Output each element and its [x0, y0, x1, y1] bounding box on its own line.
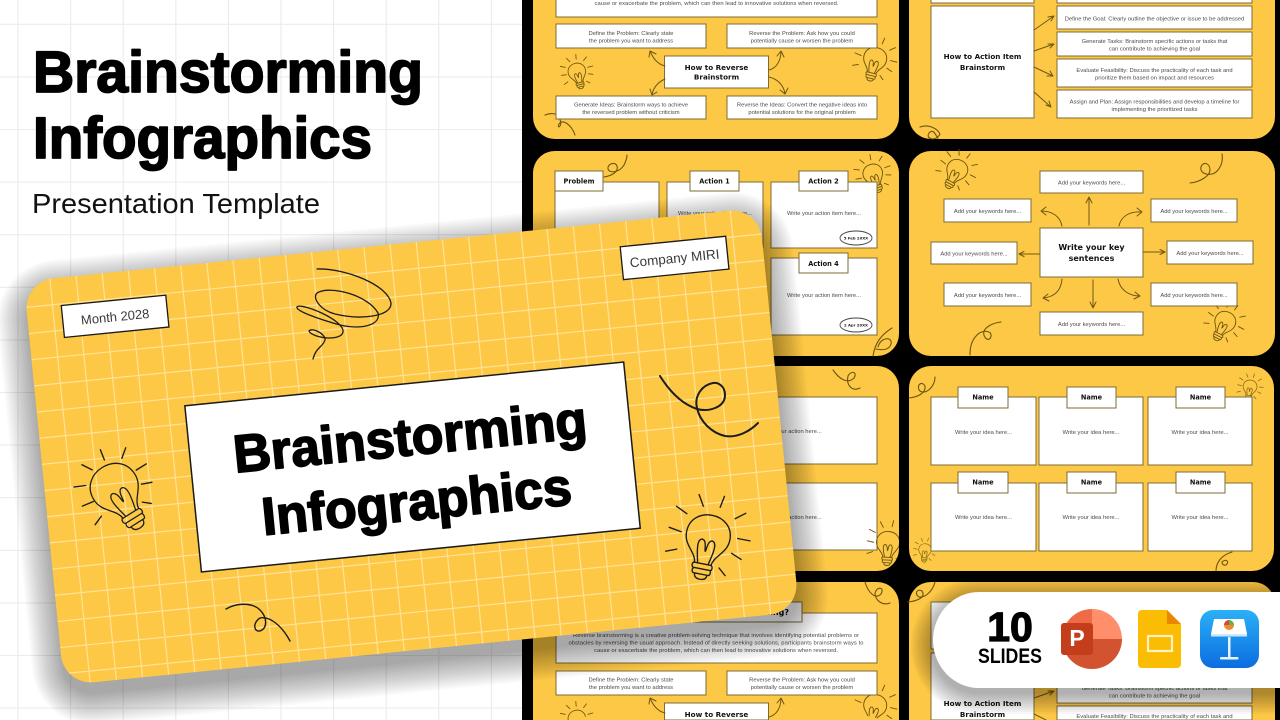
slide thumbnail: what is reverse brainstorming (bottom): obstacles by reversing the usual approach. Instead of directly seeking solutions, participants brainstorm ways to: [568, 640, 864, 646]
slide thumbnail: how to action item brainstorm (bottom): Evaluate Feasibility: Discuss the practicality of each task and: [1076, 714, 1233, 720]
title: Brainstorming Infographics: Infographics: [33, 106, 372, 171]
slide thumbnail: how to reverse brainstorm (top): potentially cause or worsen the problem: [751, 38, 853, 44]
slide thumbnail: what is reverse brainstorming (bottom): Reverse brainstorming is a creative problem-solving technique that involves identifying potential problems or: [573, 633, 859, 639]
slide thumbnail: how to action item brainstorm (top): Brainstorm: [960, 63, 1005, 72]
slide thumbnail: how to reverse brainstorm (top): Define the Problem: Clearly state: [588, 31, 674, 37]
slide thumbnail: key sentence mind map: Write your key: [1058, 243, 1125, 252]
slide thumbnail: key sentence mind map: Add your keywords here...: [954, 209, 1022, 215]
slide thumbnail: key sentence mind map: Add your keywords here...: [1058, 322, 1126, 328]
slide thumbnail: six name cards: Name: [1081, 478, 1103, 486]
black backdrop for slide thumbnails: [522, 0, 1280, 720]
slide thumbnail: six name cards: Name: [1190, 478, 1212, 486]
slide thumbnail: problem and action items: [533, 149, 899, 356]
slide thumbnail: problem and action items: Action 2: [808, 178, 839, 186]
slide thumbnail: six name cards: Write your idea here...: [955, 515, 1012, 521]
slide thumbnail: six name cards: [909, 366, 1274, 571]
slide thumbnail: six name cards: Name: [972, 478, 994, 486]
slide thumbnail: six name cards: Name: [972, 394, 994, 402]
slide thumbnail: how to action item brainstorm (top): Evaluate Feasibility: Discuss the practicality of each task and: [1076, 68, 1233, 74]
slide thumbnail: what is reverse brainstorming (bottom): cause or exacerbate the problem, which can then lead to innovative solutions when reversed.: [594, 648, 838, 654]
icon: light bulb left: [62, 433, 165, 541]
slide thumbnail: six name cards: Write your idea here...: [1172, 515, 1229, 521]
icon: Google Slides: [1138, 610, 1181, 668]
slide thumbnail: how to reverse brainstorm (top): Brainstorm: [694, 72, 739, 82]
title: Brainstorming Infographics: Brainstorming: [33, 40, 423, 105]
slide thumbnail: problem and action items: Write your action item here...: [678, 211, 752, 217]
slide thumbnail: six name cards: Name: [1081, 394, 1103, 402]
slide thumbnail: key sentence mind map: [909, 143, 1275, 356]
slide thumbnail: problem and action items: Write your action item here...: [787, 293, 861, 299]
slide thumbnail: key sentence mind map: Add your keywords here...: [1176, 251, 1244, 257]
slide thumbnail: what is reverse brainstorming (bottom): How to Reverse: [685, 710, 748, 719]
subtitle: Presentation Template: Presentation Template: [32, 188, 320, 219]
doodle: scribble: [297, 269, 391, 359]
slide thumbnail: how to action item brainstorm (bottom): Generate Tasks: Brainstorm specific actions or tasks that: [1082, 686, 1228, 692]
cover title box: Infographics: [259, 457, 574, 547]
slide thumbnail: problem and action items: Write your action item here...: [787, 211, 861, 217]
badge: 10 slides and app icons: [911, 578, 1280, 714]
slide thumbnail: how to action item brainstorm (top): Assign and Plan: Assign responsibilities and develop a timeline for: [1070, 100, 1239, 106]
slide thumbnail: how to action item brainstorm (bottom): Brainstorm: [960, 710, 1005, 719]
slide thumbnail: what is reverse brainstorming (bottom): Define the Problem: Clearly state: [588, 678, 674, 684]
slide thumbnail: problem and action items: 5 Feb 20XX: [844, 236, 868, 240]
slide thumbnail: how to action item brainstorm (top): [909, 0, 1275, 139]
icon: light bulb right: [661, 487, 757, 587]
slide thumbnail: how to action item brainstorm (top): implementing the prioritized tasks: [1111, 107, 1198, 113]
icon: Keynote: [1200, 610, 1259, 668]
slide thumbnail: how to reverse brainstorm (top): potential solutions for the original problem: [748, 110, 856, 116]
slide thumbnail: what is reverse brainstorming (bottom): Reverse the Problem: Ask how you could: [749, 678, 855, 684]
slide count: 10: [987, 604, 1033, 650]
slide thumbnail: key sentence mind map: Add your keywords here...: [1058, 180, 1126, 186]
slide thumbnail: problem and action items: Action 1: [699, 178, 730, 186]
slide thumbnail: how to action item brainstorm (bottom): can contribute to achieving the goal: [1109, 694, 1200, 700]
icon: PowerPoint: P: [1069, 625, 1085, 651]
slide thumbnail: what is reverse brainstorming (bottom): the problem you want to address: [589, 685, 673, 691]
slide thumbnail: action panels: [774, 366, 899, 571]
slide thumbnail: key sentence mind map: Add your keywords here...: [1160, 209, 1228, 215]
slide thumbnail: how to reverse brainstorm (top): the problem you want to address: [589, 38, 673, 44]
slide thumbnail: how to reverse brainstorm (top): [533, 0, 902, 139]
slide thumbnail: how to action item brainstorm (top): Generate Tasks: Brainstorm specific actions or tasks that: [1082, 39, 1228, 45]
slide thumbnail: six name cards: Write your idea here...: [955, 430, 1012, 436]
slide count: [978, 604, 1042, 668]
slide thumbnail: how to action item brainstorm (bottom): How to Action Item: [944, 699, 1021, 708]
icon: PowerPoint: [1061, 609, 1122, 669]
slide thumbnail: how to action item brainstorm (top): Define the Goal: Clearly outline the objective or issue to be addressed: [1065, 16, 1244, 22]
slide thumbnail: how to reverse brainstorm (top): Reverse the Ideas: Convert the negative ideas into: [737, 102, 867, 108]
doodle: loop curl right: [660, 376, 758, 436]
doodle: small squiggle: [226, 604, 290, 641]
slide thumbnail: six name cards: Name: [1190, 394, 1212, 402]
label: Month 2028: [61, 295, 169, 337]
slide thumbnail: what is reverse brainstorming (bottom): What is Reverse Brainstorming?: [644, 608, 789, 617]
slide thumbnail: six name cards: Write your idea here...: [1172, 430, 1229, 436]
title: Brainstorming Infographics: [33, 40, 423, 171]
slide thumbnail: six name cards: Write your idea here...: [1063, 515, 1120, 521]
main yellow slide card: [0, 187, 833, 720]
slide thumbnail: how to action item brainstorm (top): prioritize them based on impact and resources: [1095, 76, 1214, 82]
slide thumbnail: how to reverse brainstorm (top): How to Reverse: [685, 63, 748, 72]
slide thumbnail: how to action item brainstorm (bottom): Define the Goal: Clearly outline the objective or issue to be addressed: [1065, 664, 1244, 670]
slide thumbnail: how to action item brainstorm (bottom): [908, 582, 1275, 720]
slide thumbnail: what is reverse brainstorming (bottom): [533, 582, 902, 720]
slide thumbnail: how to action item brainstorm (top): How to Action Item: [944, 52, 1021, 61]
label: Company MIRI: Company MIRI: [629, 247, 720, 270]
slide thumbnail: six name cards: Write your idea here...: [1063, 430, 1120, 436]
label: Company MIRI: [620, 236, 729, 280]
slide thumbnail: action panels: Write your action here...: [760, 429, 822, 435]
slide thumbnail: problem and action items: Problem: [564, 178, 595, 186]
slide thumbnail: key sentence mind map: Add your keywords here...: [954, 293, 1022, 299]
slide thumbnail: problem and action items: 2 Apr 20XX: [844, 322, 868, 328]
cover title box: Brainstorming: [231, 391, 590, 485]
slide thumbnail: how to reverse brainstorm (top): Reverse the Problem: Ask how you could: [749, 31, 855, 37]
slide thumbnail: key sentence mind map: Add your keywords here...: [940, 252, 1008, 258]
slide count: SLIDES: [978, 645, 1042, 668]
slide thumbnail: how to action item brainstorm (top): can contribute to achieving the goal: [1109, 46, 1200, 52]
slide thumbnail: what is reverse brainstorming (bottom): potentially cause or worsen the problem: [751, 685, 853, 691]
slide thumbnail: key sentence mind map: Add your keywords here...: [1160, 293, 1228, 299]
label: Month 2028: Month 2028: [80, 306, 150, 328]
slide thumbnail: how to reverse brainstorm (top): cause or exacerbate the problem, which can then lead to innovative solutions when reversed.: [594, 1, 839, 7]
slide thumbnail: key sentence mind map: sentences: [1069, 254, 1115, 263]
slide thumbnail: problem and action items: Action 4: [808, 260, 839, 268]
cover title box: [185, 362, 640, 572]
slide thumbnail: how to reverse brainstorm (top): the reversed problem without criticism: [582, 110, 680, 116]
slide thumbnail: how to reverse brainstorm (top): Generate Ideas: Brainstorm ways to achieve: [574, 102, 688, 108]
slide thumbnail: action panels: Write your action here...: [760, 515, 822, 521]
